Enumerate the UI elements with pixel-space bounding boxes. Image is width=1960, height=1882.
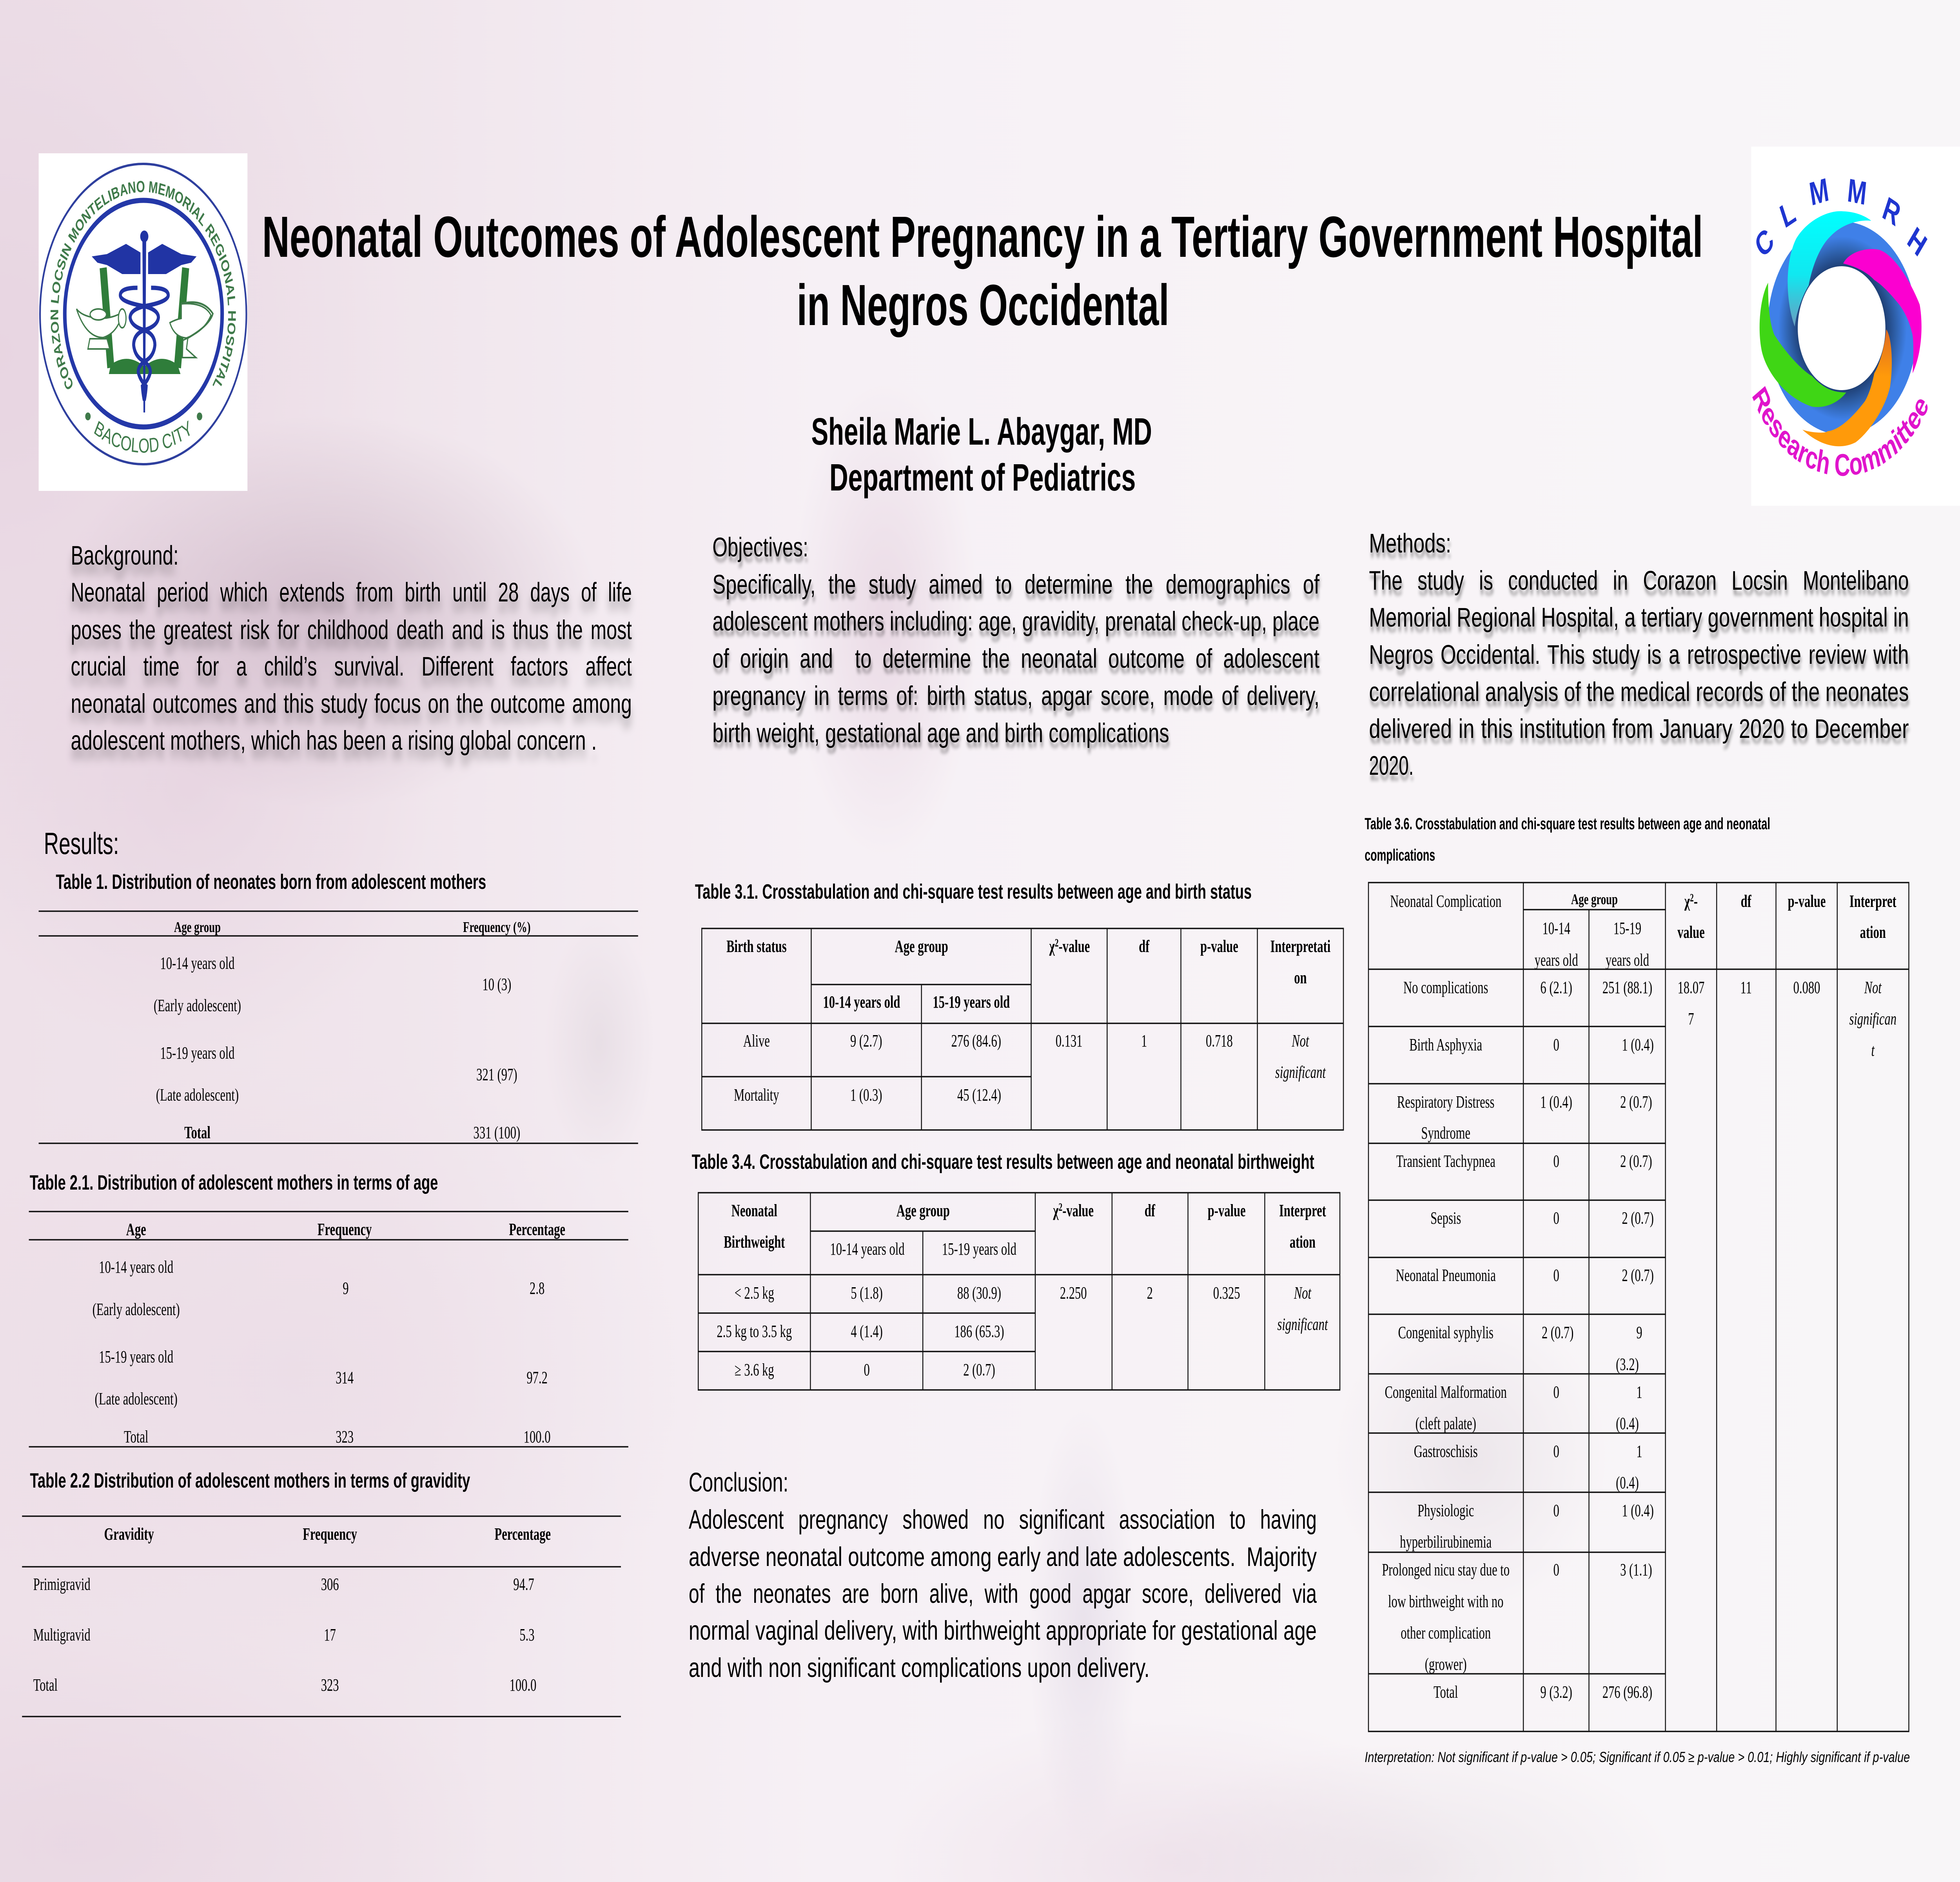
panel: table 2.2 mothers by gravidity: 306 <box>321 1575 339 1594</box>
panel: table 2.1 mothers by age: Frequency <box>318 1220 372 1239</box>
panel: table 3.6 age and neonatal complications: 2 (0.7) <box>1622 1266 1654 1285</box>
panel: table 3.6 age and neonatal complications: Syndrome <box>1421 1124 1470 1143</box>
panel: table 3.6 age and neonatal complications: χ <box>1684 892 1690 911</box>
text block: conclusion: Conclusion: <box>689 1467 788 1497</box>
panel: table 3.4 age and birthweight: 15-19 years old <box>942 1240 1016 1259</box>
panel: table 3.6 age and neonatal complications: 0 <box>1553 1560 1559 1579</box>
text block: conclusion: normal vaginal delivery, with birthweight appropriate for gestational age <box>689 1615 1317 1646</box>
panel: table 3.1 age and birth status: Mortality <box>734 1086 779 1104</box>
panel: table 3.4 age and birthweight: < 2.5 kg <box>735 1284 774 1303</box>
panel: table 2.2 mothers by gravidity: Percentage <box>495 1525 551 1544</box>
panel: table 3.6 age and neonatal complications: Respiratory Distress <box>1397 1093 1494 1112</box>
panel: table 3.4 age and birthweight: Birthweight <box>724 1233 785 1252</box>
logo: CLMMRH research committee: L <box>1776 194 1800 235</box>
panel: table 3.4 age and birthweight: p-value <box>1208 1201 1246 1220</box>
panel: table 3.6 age and neonatal complications: 1 (0.4) <box>1622 1501 1654 1520</box>
panel: table 2.2 mothers by gravidity: Gravidity <box>104 1525 154 1544</box>
panel: table 3.6 age and neonatal complications: 18.07 <box>1678 978 1704 997</box>
panel: table 3.1 age and birth status: significant <box>1275 1063 1326 1082</box>
panel: table 3.4 age and birthweight: Neonatal <box>731 1201 777 1220</box>
panel: table 3.1 age and birth status: 0.718 <box>1206 1032 1233 1050</box>
text block: methods: Methods: <box>1369 528 1451 558</box>
panel: table 3.6 age and neonatal complications: 1 (0.4) <box>1622 1035 1654 1054</box>
panel: table 3.4 age and birthweight: 2.250 <box>1060 1284 1087 1303</box>
panel: table 2.2 mothers by gravidity: 17 <box>324 1626 336 1644</box>
panel: table 3.6 age and neonatal complications <box>1365 814 1909 1731</box>
panel: table 3.6 age and neonatal complications: Sepsis <box>1430 1209 1461 1228</box>
panel: table 3.6 age and neonatal complications: 2 <box>1690 892 1694 904</box>
text block: conclusion: adverse neonatal outcome among early and late adolescents. Majority <box>689 1541 1317 1572</box>
panel: table 3.6 age and neonatal complications: 11 <box>1740 978 1752 997</box>
text block: objectives: of origin and to determine the neonatal outcome of adolescent <box>712 643 1319 674</box>
title <box>262 204 1703 337</box>
panel: table 2.1 mothers by age: 323 <box>336 1428 354 1446</box>
panel: table 3.1 age and birth status: 1 <box>1141 1032 1147 1050</box>
panel: table 1 neonates by maternal age: 321 (97) <box>476 1065 517 1084</box>
logo: CLMMRH research committee: H <box>1903 220 1931 263</box>
panel: table 3.4 age and birthweight: -value <box>1062 1201 1094 1220</box>
panel: table 3.1 age and birth status: Age group <box>895 937 948 956</box>
text block: methods: 2020. <box>1369 750 1414 781</box>
panel: table 2.1 mothers by age: 97.2 <box>526 1368 548 1387</box>
text block: objectives: birth weight, gestational age and birth complications <box>712 718 1169 748</box>
panel: table 3.6 age and neonatal complications: - <box>1694 892 1698 911</box>
panel: table 3.6 age and neonatal complications: 9 <box>1636 1323 1642 1342</box>
panel: table 3.1 age and birth status: 9 (2.7) <box>850 1032 882 1050</box>
author and department <box>811 410 1152 499</box>
panel: table 3.6 age and neonatal complications: (3.2) <box>1616 1355 1639 1374</box>
panel: table 3.6 age and neonatal complications: Total <box>1434 1683 1458 1702</box>
text block: background: neonatal outcomes and this study focus on the outcome among <box>71 688 632 719</box>
text block: objectives: Objectives: <box>712 532 808 562</box>
panel: table 1 neonates by maternal age: (Late adolescent) <box>156 1086 239 1104</box>
panel: table 3.6 age and neonatal complications: 1 <box>1636 1383 1642 1402</box>
panel: table 1 neonates by maternal age: Table 1. Distribution of neonates born from adolescent mothers <box>56 870 486 894</box>
panel: table 2.1 mothers by age: Table 2.1. Distribution of adolescent mothers in terms of age <box>30 1171 438 1194</box>
panel: table 3.4 age and birthweight: ≥ 3.6 kg <box>735 1361 774 1379</box>
panel: table 3.4 age and birthweight: 88 (30.9) <box>957 1284 1001 1303</box>
panel: table 2.2 mothers by gravidity: 323 <box>321 1676 339 1695</box>
panel: table 3.6 age and neonatal complications: t <box>1871 1041 1875 1060</box>
panel: table 2.2 mothers by gravidity: Multigravid <box>33 1626 91 1644</box>
panel: table 3.6 age and neonatal complications: 6 (2.1) <box>1540 978 1572 997</box>
title: Neonatal Outcomes of Adolescent Pregnancy in a Tertiary Government Hospital <box>262 204 1703 269</box>
footnote: interpretation key: Interpretation: Not significant if p-value > 0.05; Significant if 0.05 ≥ p-value > 0.01; Highly significant if p-value <box>1365 1749 1910 1765</box>
panel: table 2.2 mothers by gravidity: Total <box>33 1676 58 1695</box>
panel: table 3.4 age and birthweight: df <box>1145 1201 1155 1220</box>
panel: table 3.4 age and birthweight: Table 3.4. Crosstabulation and chi-square test results between age and neonatal birthweight <box>692 1150 1314 1174</box>
logo: hospital seal <box>39 153 247 491</box>
panel: table 3.6 age and neonatal complications: 0 <box>1553 1442 1559 1461</box>
panel: table 1 neonates by maternal age: 15-19 years old <box>160 1044 235 1063</box>
panel: table 3.6 age and neonatal complications: Congenital Malformation <box>1385 1383 1507 1402</box>
panel: table 2.2 mothers by gravidity: Primigravid <box>33 1575 91 1594</box>
panel: table 3.6 age and neonatal complications: 2 (0.7) <box>1620 1152 1652 1171</box>
panel: table 3.4 age and birthweight: Interpret <box>1279 1201 1326 1220</box>
text block: objectives <box>712 532 1319 748</box>
logo: CLMMRH research committee <box>1748 147 1960 506</box>
panel: table 3.6 age and neonatal complications: years old <box>1535 951 1578 970</box>
panel: table 2.1 mothers by age: (Late adolescent) <box>95 1390 178 1408</box>
panel: table 3.6 age and neonatal complications: 7 <box>1688 1010 1694 1028</box>
panel: table 3.6 age and neonatal complications: Table 3.6. Crosstabulation and chi-square test results between age and neonatal <box>1365 814 1770 833</box>
panel: table 3.4 age and birthweight: Not <box>1294 1284 1312 1303</box>
panel: table 3.6 age and neonatal complications: 0 <box>1553 1266 1559 1285</box>
panel: table 3.6 age and neonatal complications: (grower) <box>1425 1655 1467 1674</box>
panel: table 2.2 mothers by gravidity <box>22 1469 621 1717</box>
panel: table 3.1 age and birth status: 15-19 years old <box>933 993 1010 1012</box>
panel: table 3.1 age and birth status: 10-14 years old <box>823 993 900 1012</box>
panel: table 3.6 age and neonatal complications: 0 <box>1553 1383 1559 1402</box>
panel: table 3.4 age and birthweight: ation <box>1290 1233 1316 1252</box>
panel: table 2.1 mothers by age: Age <box>126 1220 146 1239</box>
panel: table 3.6 age and neonatal complications: 2 (0.7) <box>1542 1323 1573 1342</box>
panel: table 3.1 age and birth status: χ <box>1049 937 1055 956</box>
panel: table 3.6 age and neonatal complications: significan <box>1849 1010 1896 1028</box>
panel: table 3.4 age and birthweight <box>692 1150 1340 1390</box>
panel: table 3.6 age and neonatal complications: Transient Tachypnea <box>1396 1152 1495 1171</box>
panel: table 2.2 mothers by gravidity: 5.3 <box>519 1626 535 1644</box>
panel: table 3.6 age and neonatal complications: Not <box>1864 978 1882 997</box>
panel: table 3.1 age and birth status: 0.131 <box>1056 1032 1082 1050</box>
panel: table 3.4 age and birthweight: 4 (1.4) <box>851 1322 883 1341</box>
panel: table 3.6 age and neonatal complications: complications <box>1365 846 1435 864</box>
text block: background <box>71 540 632 756</box>
panel: table 3.6 age and neonatal complications: df <box>1741 892 1751 911</box>
panel: table 3.4 age and birthweight: 2.5 kg to 3.5 kg <box>717 1322 792 1341</box>
panel: table 2.1 mothers by age: (Early adolescent) <box>93 1300 180 1319</box>
panel: table 2.1 mothers by age: 2.8 <box>530 1279 544 1298</box>
panel: table 2.2 mothers by gravidity: 100.0 <box>510 1676 536 1695</box>
logo: CLMMRH research committee: C <box>1750 222 1779 265</box>
panel: table 2.2 mothers by gravidity: Table 2.2 Distribution of adolescent mothers in terms of gravidity <box>30 1469 470 1492</box>
panel: table 3.4 age and birthweight: χ <box>1053 1201 1059 1220</box>
panel: table 3.6 age and neonatal complications: 0 <box>1553 1035 1559 1054</box>
logo: CLMMRH research committee: M <box>1846 172 1868 212</box>
panel: table 3.4 age and birthweight: 0.325 <box>1213 1284 1240 1303</box>
panel: table 2.2 mothers by gravidity: Frequency <box>303 1525 357 1544</box>
panel: table 3.6 age and neonatal complications: years old <box>1606 951 1649 970</box>
panel: table 3.6 age and neonatal complications: 0 <box>1553 1152 1559 1171</box>
author and department: Sheila Marie L. Abaygar, MD <box>811 410 1152 453</box>
panel: table 3.6 age and neonatal complications: (cleft palate) <box>1416 1414 1476 1433</box>
text block: objectives: pregnancy in terms of: birth status, apgar score, mode of delivery, <box>712 680 1319 711</box>
panel: table 3.4 age and birthweight: significant <box>1277 1315 1328 1334</box>
panel: table 2.1 mothers by age <box>29 1171 628 1447</box>
text block: objectives: Specifically, the study aimed to determine the demographics of <box>712 569 1319 599</box>
panel: table 2.1 mothers by age: 9 <box>343 1279 349 1298</box>
panel: table 3.1 age and birth status: Not <box>1291 1032 1310 1050</box>
panel: table 1 neonates by maternal age: 331 (100) <box>474 1123 520 1142</box>
panel: table 3.6 age and neonatal complications: other complication <box>1401 1624 1491 1642</box>
panel: table 1 neonates by maternal age: Frequency (%) <box>463 919 531 936</box>
panel: table 3.6 age and neonatal complications: p-value <box>1788 892 1826 911</box>
text block: conclusion: of the neonates are born alive, with good apgar score, delivered via <box>689 1578 1317 1609</box>
panel: table 3.6 age and neonatal complications: 276 (96.8) <box>1602 1683 1652 1702</box>
text block: background: Background: <box>71 540 179 570</box>
panel: table 2.1 mothers by age: 10-14 years old <box>99 1258 173 1277</box>
panel: table 3.6 age and neonatal complications: 0 <box>1553 1209 1559 1228</box>
panel: table 3.6 age and neonatal complications: Birth Asphyxia <box>1409 1035 1482 1054</box>
logo: CLMMRH research committee: R <box>1879 190 1904 233</box>
panel: table 3.1 age and birth status: Table 3.1. Crosstabulation and chi-square test results between age and birth status <box>695 880 1252 903</box>
text block: background: adolescent mothers, which has been a rising global concern . <box>71 725 597 756</box>
panel: table 1 neonates by maternal age: Age group <box>174 919 221 936</box>
panel: table 3.6 age and neonatal complications: 2 (0.7) <box>1622 1209 1654 1228</box>
panel: table 3.6 age and neonatal complications: 9 (3.2) <box>1540 1683 1572 1702</box>
panel: table 1 neonates by maternal age: 10-14 years old <box>160 954 235 973</box>
panel: table 1 neonates by maternal age <box>39 870 638 1143</box>
panel: table 3.6 age and neonatal complications: No complications <box>1403 978 1488 997</box>
text block: objectives: adolescent mothers including: age, gravidity, prenatal check-up, place <box>712 606 1319 636</box>
panel: table 3.6 age and neonatal complications: 3 (1.1) <box>1620 1560 1652 1579</box>
panel: table 1 neonates by maternal age: (Early adolescent) <box>154 996 241 1015</box>
panel: table 3.6 age and neonatal complications: 10-14 <box>1543 919 1570 938</box>
panel: table 3.6 age and neonatal complications: Neonatal Pneumonia <box>1396 1266 1496 1285</box>
panel: table 2.1 mothers by age: Total <box>124 1428 148 1446</box>
heading: results: Results: <box>44 827 119 861</box>
text block: background: Neonatal period which extends from birth until 28 days of life <box>71 577 632 607</box>
panel: table 3.1 age and birth status: -value <box>1059 937 1090 956</box>
panel: table 3.6 age and neonatal complications: 1 <box>1636 1442 1642 1461</box>
panel: table 3.1 age and birth status: Alive <box>743 1032 770 1050</box>
panel: table 3.4 age and birthweight: 2 <box>1059 1202 1062 1213</box>
logo: hospital seal: CORAZON LOCSIN MONTELIBANO MEMORIAL REGIONAL HOSPITAL <box>49 178 238 393</box>
panel: table 3.1 age and birth status: Birth status <box>726 937 787 956</box>
panel: table 2.1 mothers by age: 314 <box>336 1368 354 1387</box>
logo: hospital seal: BACOLOD CITY <box>91 416 195 457</box>
panel: table 3.6 age and neonatal complications: Gastroschisis <box>1414 1442 1478 1461</box>
panel: table 3.1 age and birth status <box>695 880 1343 1130</box>
panel: table 3.6 age and neonatal complications: Prolonged nicu stay due to <box>1382 1560 1510 1579</box>
text block: conclusion <box>689 1467 1317 1683</box>
panel: table 1 neonates by maternal age: 10 (3) <box>482 975 511 994</box>
panel: table 3.6 age and neonatal complications: hyperbilirubinemia <box>1400 1533 1492 1551</box>
logo: CLMMRH research committee: M <box>1807 171 1831 213</box>
panel: table 3.6 age and neonatal complications: Congenital syphylis <box>1398 1323 1494 1342</box>
panel: table 3.1 age and birth status: 1 (0.3) <box>850 1086 882 1104</box>
panel: table 3.4 age and birthweight: 0 <box>864 1361 870 1379</box>
text block: conclusion: Adolescent pregnancy showed no significant association to having <box>689 1504 1317 1535</box>
text block: methods: Negros Occidental. This study is a retrospective review with <box>1369 639 1909 670</box>
panel: table 3.1 age and birth status: on <box>1294 968 1307 987</box>
panel: table 3.6 age and neonatal complications: 2 (0.7) <box>1620 1093 1652 1112</box>
title: in Negros Occidental <box>797 272 1169 337</box>
panel: table 2.1 mothers by age: 15-19 years old <box>99 1348 173 1366</box>
panel: table 2.1 mothers by age: 100.0 <box>524 1428 550 1446</box>
panel: table 3.6 age and neonatal complications: Neonatal Complication <box>1390 892 1501 911</box>
panel: table 2.2 mothers by gravidity: 94.7 <box>513 1575 534 1594</box>
panel: table 3.6 age and neonatal complications: ation <box>1860 923 1886 942</box>
text block: methods: The study is conducted in Corazon Locsin Montelibano <box>1369 565 1909 596</box>
panel: table 1 neonates by maternal age: Total <box>184 1123 211 1142</box>
panel: table 3.1 age and birth status: 276 (84.6) <box>951 1032 1001 1050</box>
panel: table 3.6 age and neonatal complications: Interpret <box>1849 892 1896 911</box>
panel: table 3.4 age and birthweight: Age group <box>897 1201 950 1220</box>
text block: conclusion: and with non significant complications upon delivery. <box>689 1652 1150 1683</box>
panel: table 3.4 age and birthweight: 10-14 years old <box>830 1240 905 1259</box>
panel: table 3.1 age and birth status: Interpretati <box>1270 937 1330 956</box>
text block: background: crucial time for a child’s survival. Different factors affect <box>71 651 632 681</box>
panel: table 3.1 age and birth status: 45 (12.4) <box>957 1086 1001 1104</box>
panel: table 3.6 age and neonatal complications: (0.4) <box>1616 1414 1639 1433</box>
panel: table 3.4 age and birthweight: 186 (65.3) <box>954 1322 1004 1341</box>
panel: table 2.1 mothers by age: Percentage <box>509 1220 565 1239</box>
panel: table 3.1 age and birth status: p-value <box>1200 937 1238 956</box>
text block: methods <box>1369 528 1909 781</box>
panel: table 3.1 age and birth status: df <box>1139 937 1150 956</box>
panel: table 3.6 age and neonatal complications: 0 <box>1553 1501 1559 1520</box>
panel: table 3.6 age and neonatal complications: Age group <box>1571 891 1618 908</box>
text block: methods: correlational analysis of the medical records of the neonates <box>1369 676 1909 707</box>
panel: table 3.4 age and birthweight: 2 (0.7) <box>963 1361 995 1379</box>
text block: background: poses the greatest risk for childhood death and is thus the most <box>71 614 632 645</box>
panel: table 3.6 age and neonatal complications: (0.4) <box>1616 1473 1639 1492</box>
panel: table 3.4 age and birthweight: 5 (1.8) <box>851 1284 883 1303</box>
panel: table 3.4 age and birthweight: 2 <box>1147 1284 1153 1303</box>
text block: methods: delivered in this institution from January 2020 to December <box>1369 713 1909 744</box>
panel: table 3.6 age and neonatal complications: 15-19 <box>1613 919 1641 938</box>
panel: table 3.6 age and neonatal complications: Physiologic <box>1417 1501 1474 1520</box>
author and department: Department of Pediatrics <box>829 456 1136 499</box>
panel: table 3.1 age and birth status: 2 <box>1055 937 1059 949</box>
logo: CLMMRH research committee: Research Committee <box>1748 381 1933 483</box>
panel: table 3.6 age and neonatal complications: 251 (88.1) <box>1602 978 1652 997</box>
panel: table 3.6 age and neonatal complications: value <box>1677 923 1705 942</box>
panel: table 3.6 age and neonatal complications: 1 (0.4) <box>1540 1093 1572 1112</box>
panel: table 3.6 age and neonatal complications: 0.080 <box>1793 978 1820 997</box>
text block: methods: Memorial Regional Hospital, a tertiary government hospital in <box>1369 602 1909 632</box>
panel: table 3.6 age and neonatal complications: low birthweight with no <box>1388 1592 1503 1611</box>
